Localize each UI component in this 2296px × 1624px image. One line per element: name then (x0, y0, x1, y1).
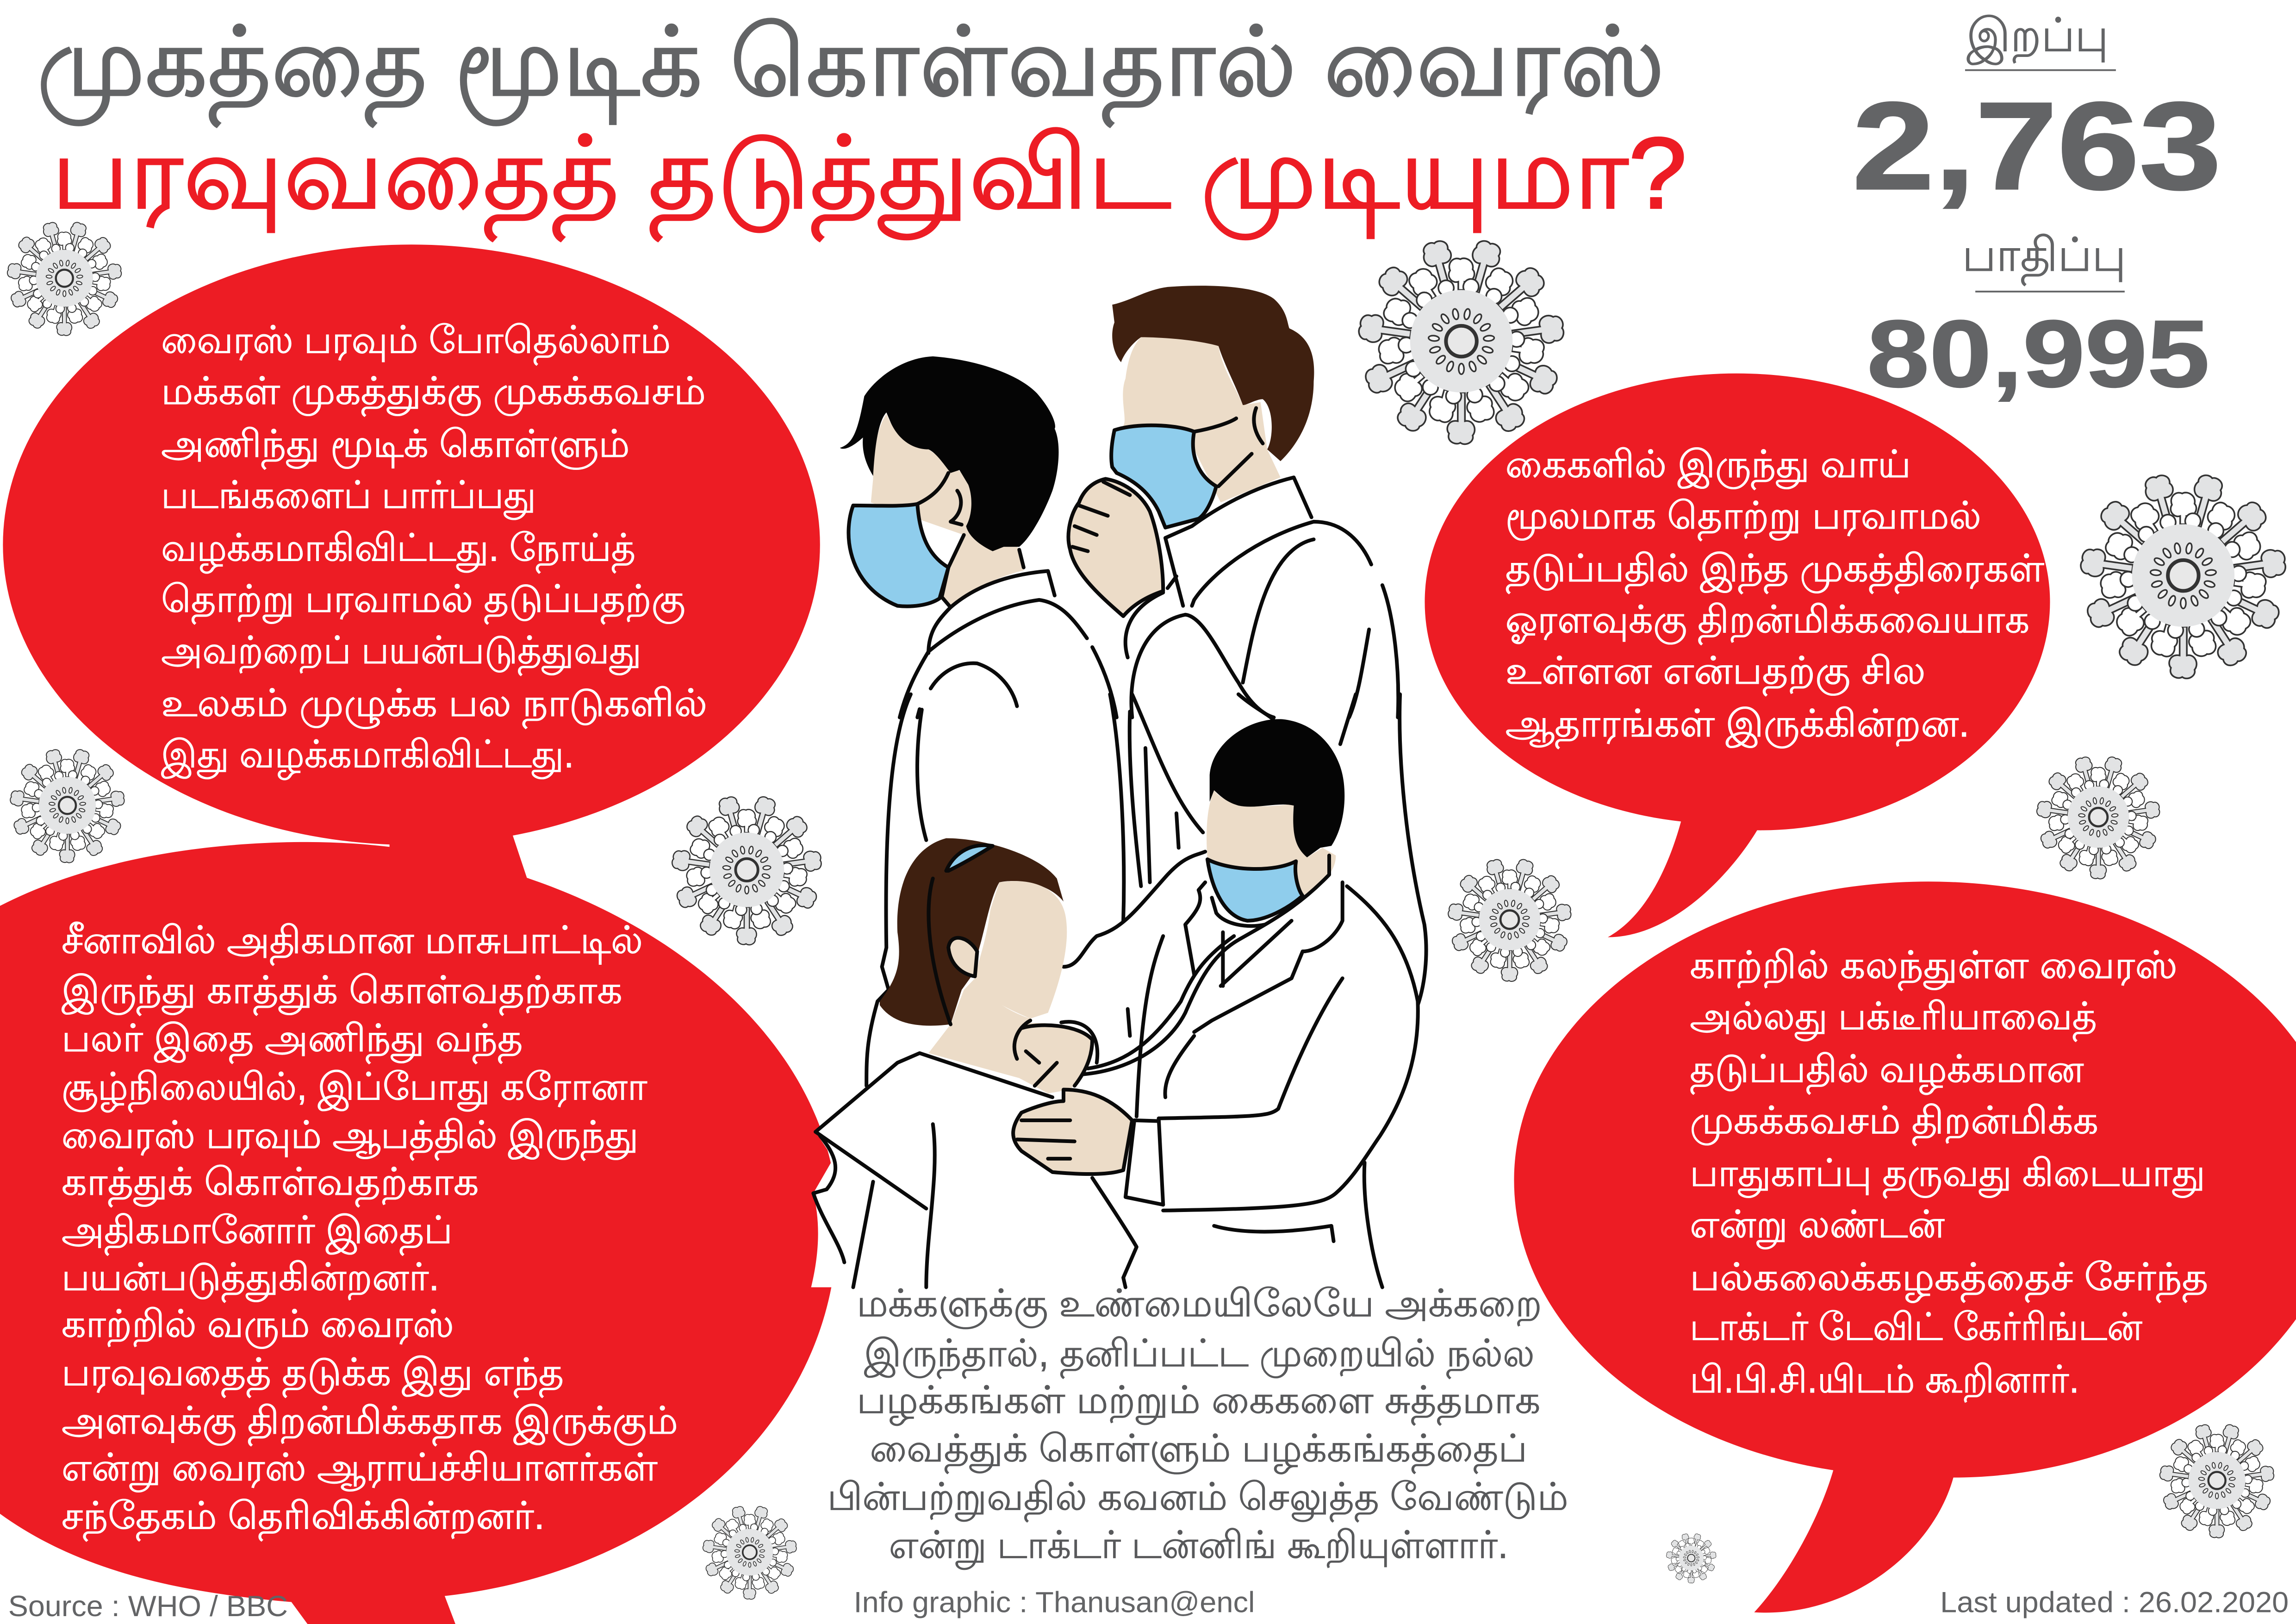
text block: lower right bubble: பல்கலைக்கழகத்தைச் சேர்ந்த (1690, 1256, 2208, 1303)
text block: lower right bubble: தடுப்பதில் வழக்கமான (1690, 1049, 2084, 1095)
text block: top right bubble: ஓரளவுக்கு திறன்மிக்கவையாக (1505, 599, 2029, 645)
icon: virus top left (6, 221, 122, 336)
text block: lower left bubble (62, 919, 678, 1541)
text block: lower left bubble: சந்தேகம் தெரிவிக்கின்றனர். (62, 1495, 545, 1541)
text block: lower right bubble: டாக்டர் டேவிட் கேர்ரிங்டன் (1690, 1306, 2142, 1348)
text block: centre advice: வைத்துக் கொள்ளும் பழக்கங்கத்தைப் (870, 1428, 1527, 1474)
title: second line question: பரவுவதைத் தடுத்துவிட முடியுமா? (51, 117, 1687, 241)
text block: top right bubble: மூலமாக தொற்று பரவாமல் (1505, 495, 1981, 541)
icon: virus top centre (1357, 238, 1565, 444)
text block: lower left bubble: சூழ்நிலையில், இப்போது கரோனா (62, 1066, 647, 1113)
text block: lower left bubble: பயன்படுத்துகின்றனர். (62, 1256, 439, 1303)
speech bubble: mask spreading (3, 244, 820, 879)
text block: top left bubble (161, 319, 707, 780)
text block: top right bubble (1505, 443, 2044, 749)
text block: top left bubble: படங்களைப் பார்ப்பது (161, 475, 536, 520)
person: doctor with stethoscope (1064, 719, 1418, 1287)
text block: centre advice: இருந்தால், தனிப்பட்ட முறையில் நல்ல (864, 1332, 1535, 1379)
text block: lower left bubble: பலர் இதை அணிந்து வந்த (62, 1018, 523, 1064)
person: coughing man with brown hair (1069, 286, 1398, 718)
text block: top left bubble: இது வழக்கமாகிவிட்டது. (161, 734, 574, 780)
text block: lower left bubble: வைரஸ் பரவும் ஆபத்தில் இருந்து (62, 1114, 638, 1161)
person: backs of coats, lower part (866, 694, 1426, 1086)
stat: cases: 80,995 (1867, 300, 2209, 407)
text block: top left bubble: உலகம் முழுக்க பல நாடுகளில் (161, 682, 707, 729)
person: man with black hair (840, 356, 1117, 718)
text block: lower left bubble: என்று வைரஸ் ஆராய்ச்சியாளர்கள் (62, 1447, 658, 1492)
text block: top left bubble: வழக்கமாகிவிட்டது. நோய்த் (161, 527, 635, 574)
text block: top right bubble: தடுப்பதில் இந்த முகத்திரைகள் (1505, 548, 2044, 594)
title: first line: முகத்தை மூடிக் கொள்வதால் வைரஸ் (37, 8, 1665, 127)
text block: lower right bubble (1690, 944, 2208, 1402)
icon: virus centre left (671, 795, 822, 945)
icon: virus left middle (10, 748, 125, 863)
text block: centre advice: மக்களுக்கு உண்மையிலேயே அக்கறை (857, 1283, 1542, 1329)
text block: top left bubble: தொற்று பரவாமல் தடுப்பதற்கு (161, 578, 685, 625)
speech bubble: hands to mouth (1425, 374, 2050, 937)
text block: top right bubble: ஆதாரங்கள் இருக்கின்றன. (1505, 703, 1969, 749)
footer: source: Source : WHO / BBC (8, 1590, 288, 1623)
stat: deaths (1852, 9, 2221, 215)
text block: lower right bubble: காற்றில் கலந்துள்ள வைரஸ் (1690, 944, 2178, 991)
text block: lower left bubble: இருந்து காத்துக் கொள்வதற்காக (62, 969, 622, 1016)
text block: top left bubble: மக்கள் முகத்துக்கு முகக்கவசம் (161, 370, 706, 417)
icon: virus right (2079, 473, 2287, 679)
text block: lower left bubble: சீனாவில் அதிகமான மாசுபாட்டில் (62, 919, 643, 966)
icon: virus bottom right (2159, 1423, 2275, 1538)
text block: lower left bubble: பரவுவதைத் தடுக்க இது எந்த (62, 1351, 564, 1398)
text block: top left bubble: வைரஸ் பரவும் போதெல்லாம் (161, 319, 671, 365)
text block: lower right bubble: என்று லண்டன் (1690, 1204, 1945, 1249)
text block: lower left bubble: அதிகமானோர் இதைப் (62, 1210, 453, 1256)
icon: small virus (1666, 1533, 1717, 1583)
text block: lower left bubble: அளவுக்கு திறன்மிக்கதாக இருக்கும் (62, 1400, 678, 1446)
person: girl patient (811, 838, 1137, 1287)
speech bubble: london professor (1514, 881, 2296, 1612)
text block: centre advice (828, 1283, 1568, 1570)
text block: lower right bubble: பி.பி.சி.யிடம் கூறினார். (1690, 1359, 2079, 1402)
footer: last updated: Last updated : 26.02.2020 (1940, 1587, 2289, 1619)
text block: lower right bubble: பாதுகாப்பு தருவது கிடையாது (1690, 1152, 2205, 1199)
icon: virus right middle (2036, 756, 2161, 879)
text block: centre advice: பழக்கங்கள் மற்றும் கைகளை சுத்தமாக (857, 1380, 1540, 1425)
text block: centre advice: என்று டாக்டர் டன்னிங் கூறியுள்ளார். (889, 1524, 1508, 1570)
icon: virus bottom centre (702, 1505, 797, 1599)
text block: top right bubble: கைகளில் இருந்து வாய் (1505, 443, 1911, 490)
text block: lower left bubble: காற்றில் வரும் வைரஸ் (62, 1303, 454, 1349)
icon: virus centre right (1447, 858, 1572, 981)
text block: lower right bubble: அல்லது பக்டீரியாவைத் (1690, 996, 2097, 1042)
illustration: masked medical people (811, 286, 1426, 1287)
text block: top right bubble: உள்ளன என்பதற்கு சில (1505, 650, 1926, 696)
stat: cases: பாதிப்பு (1962, 229, 2126, 286)
text block: centre advice: பின்பற்றுவதில் கவனம் செலுத்த வேண்டும் (828, 1476, 1568, 1522)
footer: credit: Info graphic : Thanusan@encl (854, 1587, 1255, 1619)
text block: top left bubble: அவற்றைப் பயன்படுத்துவது (161, 630, 641, 676)
speech bubble: pollution and virus (0, 842, 838, 1624)
text block: lower left bubble: காத்துக் கொள்வதற்காக (62, 1161, 479, 1207)
stat: cases (1867, 229, 2209, 407)
text block: lower right bubble: முகக்கவசம் திறன்மிக்க (1690, 1099, 2098, 1146)
stat: deaths: இறப்பு (1966, 9, 2109, 65)
stat: deaths: 2,763 (1852, 76, 2221, 215)
text block: top left bubble: அணிந்து மூடிக் கொள்ளும் (161, 423, 629, 469)
